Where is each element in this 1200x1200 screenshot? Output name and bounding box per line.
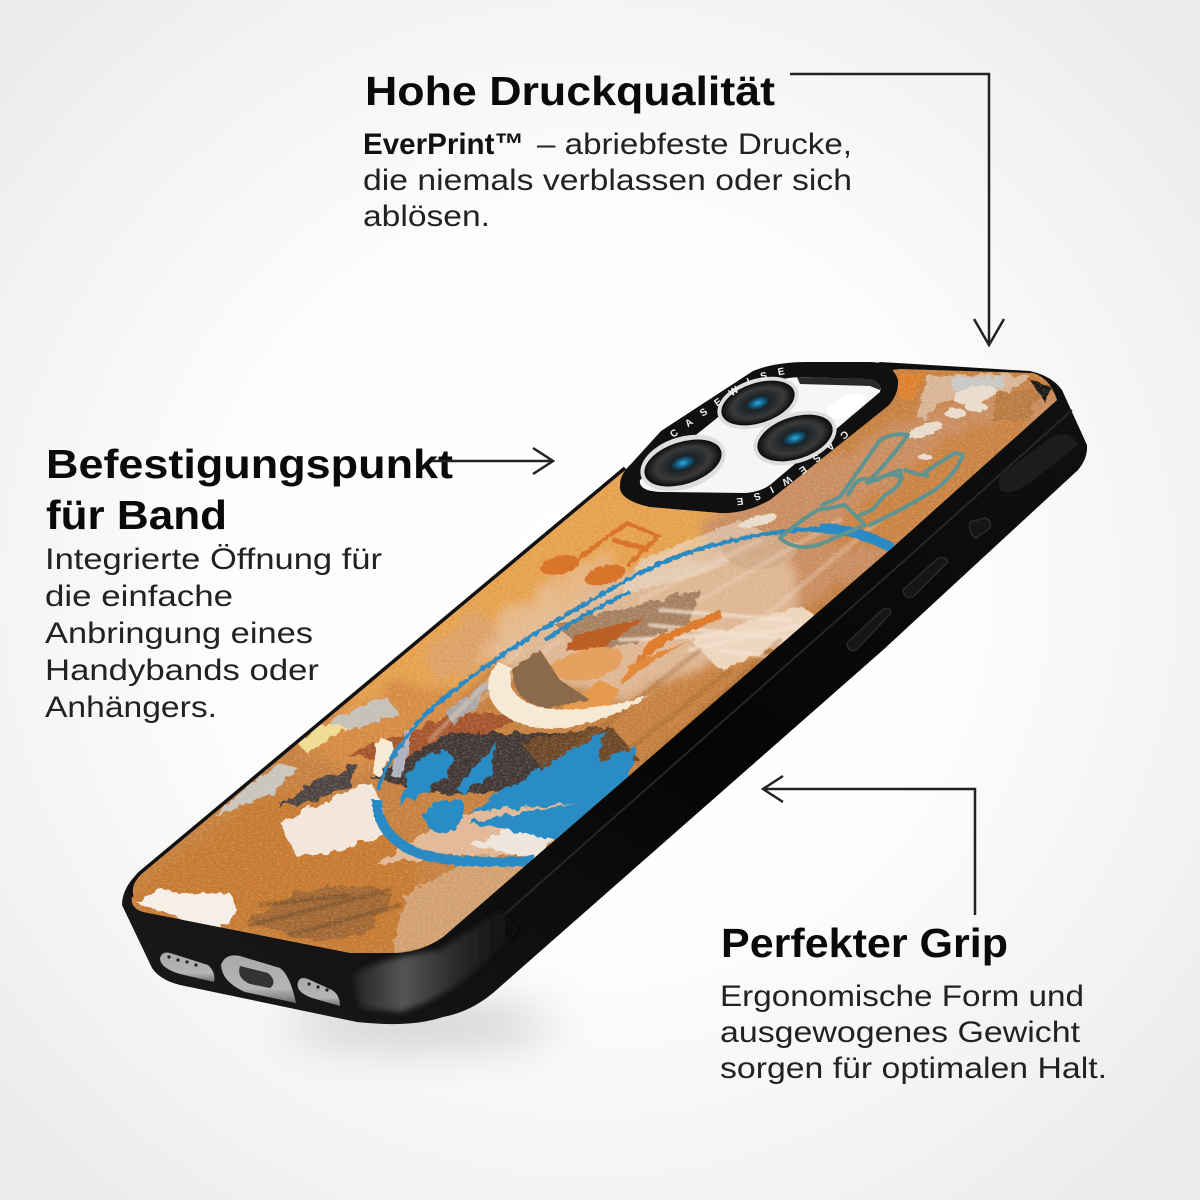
text: print quality description [363,128,852,233]
bezel logo top: CASEWISE [670,368,785,437]
text: grip description: ausgewogenes Gewicht [720,1016,1081,1049]
side highlight groove [405,410,1072,972]
text: strap description: Integrierte Öffnung für [45,543,382,576]
orange circle and white crescent [488,647,650,728]
text: grip description: sorgen für optimalen Halt. [720,1052,1107,1085]
bezel logo bottom: CASEWISE [736,432,848,506]
camera bezel [620,362,898,514]
heading: Perfekter Grip: Perfekter Grip [721,920,1008,966]
callout: print quality [363,68,852,233]
arrow: to camera attachment [432,448,553,474]
text: strap description: Anhängers. [45,691,217,724]
speckled highlights [620,383,998,595]
printed back artwork [120,360,1070,960]
metal hand outline [780,434,963,547]
brush streaks [250,520,880,935]
lens right [751,406,839,470]
soft colour fields [130,385,1070,950]
paper grain [120,360,1070,960]
glossy corner [353,910,520,1012]
print rim [131,468,625,897]
text: grip description: Ergonomische Form und [720,980,1084,1013]
text: print quality description: EverPrint™ [363,128,524,161]
heading: Befestigungspunkt für Band: Befestigungspunkt [46,441,453,487]
text: strap description: Handybands oder [45,654,319,687]
arrow: to top edge [790,74,1004,345]
right speaker grille [298,978,340,1006]
arrow: to phone side [763,776,975,915]
text: strap description: Anbringung eines [45,617,313,650]
heading: Befestigungspunkt für Band: für Band [46,492,227,538]
side buttons [847,434,1078,651]
charging port [221,955,296,1003]
lens left [638,431,728,495]
callout: grip [720,920,1107,1085]
text: grip description [720,980,1107,1085]
text: print quality description: – abriebfeste Drucke, [537,128,852,161]
heading: Befestigungspunkt für Band [46,441,453,538]
orange brush strokes [565,610,722,685]
blue arc [377,528,892,862]
text: strap description: die einfache [45,580,233,613]
text: strap description [45,543,382,724]
case body [122,362,1087,1024]
shadow under phone [285,1003,555,1047]
paint patches [137,372,1052,953]
blue hand print [400,730,637,840]
phone case illustration [122,362,1088,1024]
heading: Hohe Druckqualität: Hohe Druckqualität [365,68,775,114]
left speaker grille [160,953,214,982]
music notes [539,523,658,589]
callout: strap attachment [45,441,453,724]
lens top [716,372,800,434]
text: print quality description: die niemals verblassen oder sich [363,164,852,197]
text: print quality description: ablösen. [363,200,490,233]
